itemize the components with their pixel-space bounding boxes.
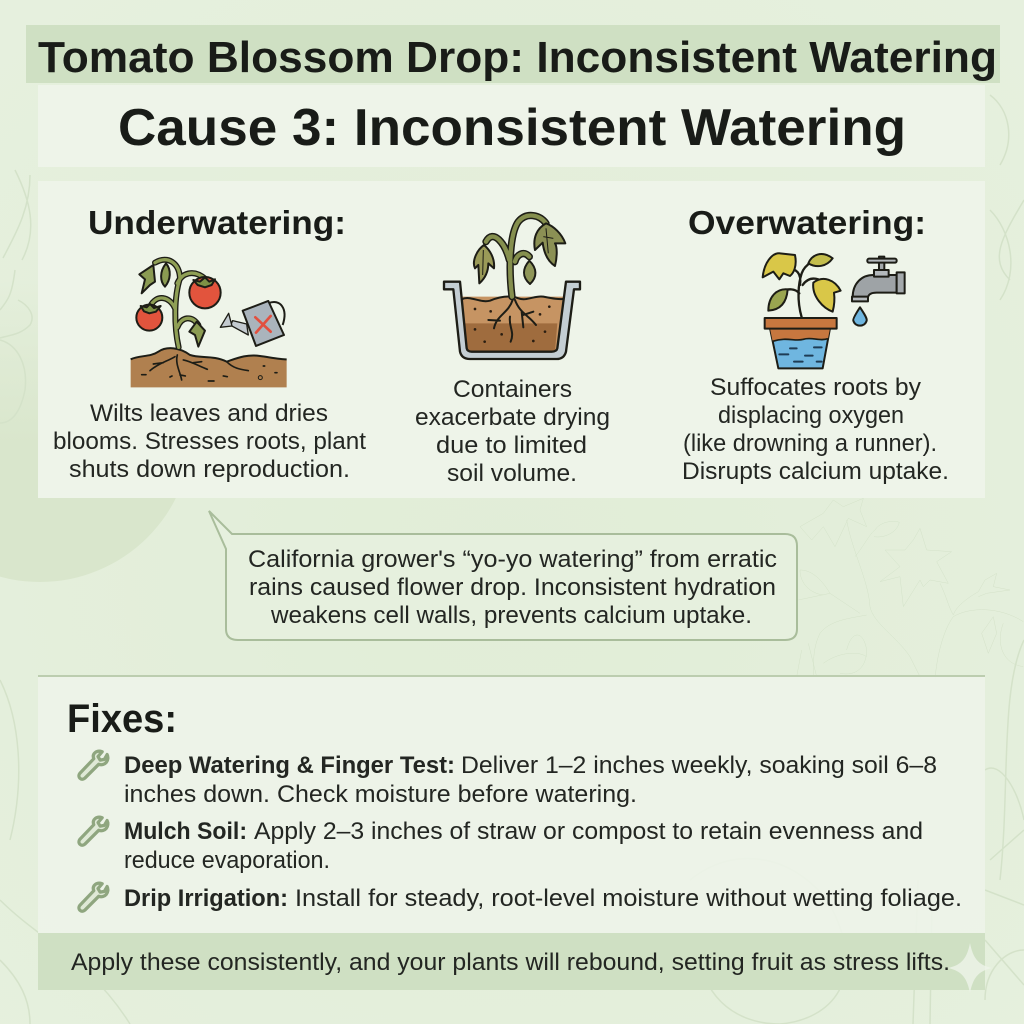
text: underwatering: shuts down reproduction. — [69, 456, 350, 483]
callout text: weakens cell walls, prevents calcium uptake. — [270, 602, 752, 629]
fix: mulch soil: Mulch Soil: — [124, 818, 247, 845]
text: underwatering — [53, 400, 366, 483]
fix: deep watering: Deliver 1–2 inches weekly, soaking soil 6–8 — [461, 752, 937, 779]
callout text: California grower's “yo-yo watering” from erratic — [248, 546, 777, 573]
footer text: Apply these consistently, and your plants will rebound, setting fruit as stress lifts. — [71, 949, 950, 976]
fix: drip irrigation: Drip Irrigation: — [124, 885, 288, 912]
fix: drip irrigation — [79, 883, 962, 912]
title band — [26, 25, 1000, 83]
callout text — [248, 546, 777, 629]
callout text: rains caused flower drop. Inconsistent hydration — [249, 574, 776, 601]
text: overwatering: displacing oxygen — [718, 402, 904, 429]
speech bubble — [209, 511, 797, 640]
panel: fixes — [38, 675, 985, 933]
text: overwatering: Suffocates roots by — [710, 374, 921, 401]
icon: wilting plant in container — [444, 215, 580, 359]
icon: wrench — [79, 751, 108, 779]
background circle — [0, 278, 192, 582]
fix: mulch soil: reduce evaporation. — [124, 847, 330, 874]
footer band — [38, 933, 985, 990]
icon: wrench — [79, 817, 108, 845]
text: containers — [415, 376, 610, 487]
heading panel: cause 3 — [38, 85, 985, 167]
icon: sparkle watermark — [948, 943, 992, 993]
column: containers — [415, 215, 610, 487]
heading: fixes: Fixes: — [67, 697, 177, 741]
column: overwatering — [682, 204, 949, 485]
callout: yo-yo watering anecdote — [209, 511, 797, 640]
text: containers: Containers — [453, 376, 572, 403]
heading: Cause 3: Inconsistent Watering — [118, 99, 906, 157]
text: underwatering: blooms. Stresses roots, plant — [53, 428, 366, 455]
fix: deep watering: inches down. Check moisture before watering. — [124, 781, 637, 808]
heading: underwatering: Underwatering: — [88, 204, 346, 241]
fix: mulch soil: Apply 2–3 inches of straw or compost to retain evenness and — [254, 818, 923, 845]
text: overwatering: (like drowning a runner). — [683, 430, 937, 457]
text: containers: soil volume. — [447, 460, 577, 487]
icon: wrench — [79, 883, 108, 911]
column: underwatering — [53, 204, 366, 483]
icon: wilting tomato plant with crossed watering can — [131, 260, 287, 387]
panel: watering problems — [38, 181, 985, 498]
text: underwatering: Wilts leaves and dries — [90, 400, 328, 427]
fix: deep watering — [79, 751, 937, 808]
text: containers: due to limited — [436, 432, 587, 459]
text: containers: exacerbate drying — [415, 404, 610, 431]
fix: deep watering: Deep Watering & Finger Test: — [124, 752, 455, 779]
fix: drip irrigation: Install for steady, root-level moisture without wetting foliage. — [295, 885, 962, 912]
heading: overwatering: Overwatering: — [688, 204, 926, 241]
fix: mulch soil — [79, 817, 923, 874]
icon: overwatered pot and dripping faucet — [763, 253, 905, 368]
title: Tomato Blossom Drop: Inconsistent Watering — [38, 33, 997, 82]
text: overwatering — [682, 374, 949, 485]
text: overwatering: Disrupts calcium uptake. — [682, 458, 949, 485]
